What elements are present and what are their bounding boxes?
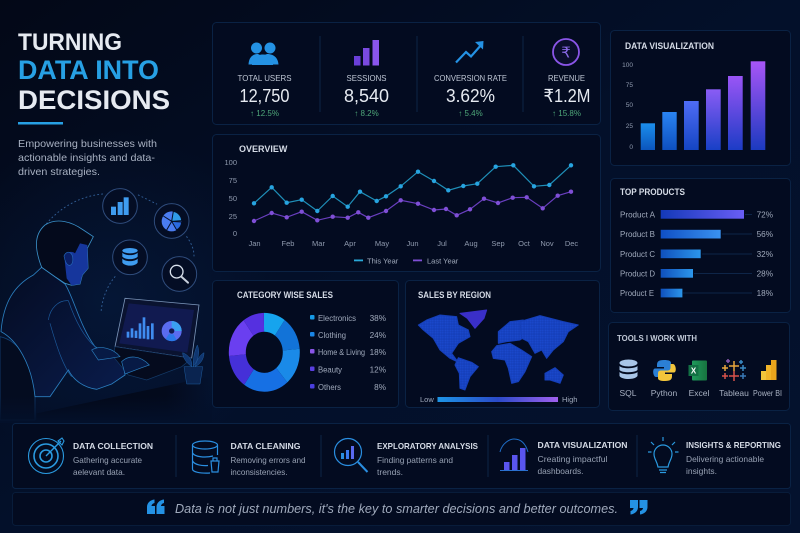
x axis: May — [375, 239, 389, 248]
legend: 38% — [370, 314, 386, 323]
quote mark close — [630, 500, 648, 514]
x axis: Apr — [344, 239, 356, 248]
panel: category wise sales — [212, 280, 398, 408]
KPI: revenue: ₹1.2M — [544, 86, 590, 106]
world map — [418, 310, 578, 390]
step: data visualization: DATA VISUALIZATION — [538, 440, 628, 450]
legend: This Year — [367, 256, 399, 266]
laptop — [113, 298, 199, 380]
KPI: revenue: ↑ 15.8% — [552, 109, 581, 118]
step: insights and reporting — [648, 437, 781, 476]
KPI: total users: 12,750 — [240, 86, 290, 106]
legend: 24% — [370, 331, 386, 340]
step: insights and reporting: Delivering actionable — [686, 455, 764, 464]
legend: Last Year — [427, 256, 459, 266]
step: data collection: Gathering accurate — [73, 456, 142, 465]
product rows — [620, 210, 773, 298]
y axis: 50 — [626, 102, 633, 109]
heading: CATEGORY WISE SALES — [237, 290, 333, 300]
step: data visualization — [500, 439, 628, 476]
step: exploratory analysis: EXPLORATORY ANALYSIS — [377, 441, 478, 451]
panel: top products — [610, 178, 790, 312]
step: insights and reporting: INSIGHTS & REPORTING — [686, 440, 781, 450]
tool label: Python: Python — [651, 388, 678, 398]
KPI: total users — [238, 42, 292, 118]
KPI: total users: ↑ 12.5% — [250, 109, 279, 118]
series: this year — [254, 165, 571, 211]
x axis: Nov — [540, 239, 554, 248]
KPI: conversion rate — [434, 41, 507, 118]
face — [65, 243, 88, 285]
x axis: Oct — [518, 239, 531, 248]
y axis: 75 — [626, 82, 633, 89]
y axis: 0 — [233, 229, 237, 238]
panel: quote — [12, 492, 790, 526]
step: data cleaning: Removing errors and — [230, 456, 306, 465]
map scale: High — [562, 395, 577, 404]
tool: SQL: SQL — [619, 388, 637, 398]
heading: TOP PRODUCTS — [620, 187, 685, 197]
product rows: Product B — [620, 230, 656, 239]
icon: bar chart bubble — [103, 189, 137, 223]
x axis: Mar — [312, 239, 325, 248]
panel: process steps — [12, 424, 790, 488]
step: data collection: DATA COLLECTION — [73, 441, 153, 451]
icon: database bubble — [113, 240, 147, 275]
tool: SQL — [619, 360, 638, 398]
KPI: sessions — [344, 40, 389, 118]
subtitle: driven strategies. — [18, 166, 100, 178]
x axis: Aug — [464, 239, 478, 248]
tool: Excel — [688, 360, 709, 398]
y axis: 25 — [229, 212, 237, 221]
quote text: Data is not just numbers, it's the key to smarter decisions and better outcomes. — [175, 502, 618, 516]
x axis: Dec — [565, 239, 578, 248]
product rows: Product D — [620, 270, 655, 278]
panel: overview line chart — [212, 134, 600, 272]
step: data visualization: Creating impactful — [538, 455, 608, 464]
x axis: Sep — [491, 239, 505, 248]
donut chart — [237, 322, 291, 382]
icon: pie bubble — [154, 204, 189, 238]
title: TURNING — [18, 29, 122, 56]
legend: 8% — [374, 383, 386, 392]
x axis: Jun — [406, 239, 419, 248]
KPI: conversion rate: ↑ 5.4% — [458, 109, 483, 118]
illustration: analyst at laptop — [0, 189, 210, 420]
desk — [37, 377, 210, 420]
KPI: sessions: 8,540 — [344, 86, 389, 106]
legend: 12% — [370, 366, 386, 374]
step: exploratory analysis: trends. — [377, 468, 403, 477]
y axis: 100 — [622, 62, 633, 69]
heading: OVERVIEW — [239, 144, 288, 154]
chair — [0, 337, 35, 420]
body — [1, 267, 125, 397]
heading: DATA VISUALIZATION — [625, 41, 714, 51]
legend: Home & Living — [318, 348, 365, 357]
legend — [354, 256, 459, 266]
subtitle: Empowering businesses with — [18, 138, 157, 150]
y axis: 0 — [629, 144, 633, 151]
y axis — [622, 62, 633, 151]
y axis — [224, 158, 237, 238]
title accent rule — [18, 122, 63, 124]
hands — [92, 348, 149, 374]
KPI: conversion rate: CONVERSION RATE — [434, 73, 507, 83]
step: exploratory analysis: Finding patterns and — [377, 456, 453, 465]
KPI: sessions: ↑ 8.2% — [354, 109, 379, 118]
plant — [183, 345, 204, 384]
tool: Python — [653, 360, 676, 381]
tool: Power BI — [753, 360, 782, 398]
KPI: revenue — [544, 39, 590, 118]
KPI: revenue: ₹ — [561, 44, 571, 62]
step: data cleaning: inconsistencies. — [230, 468, 288, 477]
step: data cleaning: DATA CLEANING — [230, 441, 301, 451]
KPI: sessions: SESSIONS — [346, 73, 387, 83]
panel: sales by region — [406, 280, 600, 408]
tool: Tableau — [719, 359, 749, 398]
step: data cleaning — [192, 441, 306, 477]
y axis: 50 — [229, 194, 237, 203]
y axis: 100 — [224, 158, 237, 167]
product rows: Product A — [620, 210, 656, 220]
panel: KPI summary — [212, 22, 600, 124]
title — [18, 29, 170, 115]
product rows: 56% — [757, 230, 773, 239]
head — [36, 221, 93, 285]
step: data collection — [28, 438, 153, 477]
icon: magnifier bubble — [162, 257, 197, 291]
map scale — [420, 395, 577, 404]
map scale: Low — [420, 395, 434, 404]
subtitle — [18, 138, 157, 178]
product rows: 28% — [757, 270, 773, 278]
product rows: Product E — [620, 289, 655, 298]
title: DECISIONS — [18, 85, 170, 115]
series: last year — [254, 192, 571, 221]
legend: 18% — [370, 348, 386, 357]
y axis: 25 — [626, 123, 633, 130]
legend: Beauty — [318, 366, 343, 374]
product rows: 18% — [757, 289, 773, 298]
legend — [310, 314, 386, 392]
tool: Power BI: Power BI — [753, 389, 782, 398]
x axis: Feb — [282, 239, 294, 248]
legend: Electronics — [318, 314, 356, 323]
tool: Excel: X — [691, 366, 697, 376]
KPI: total users: TOTAL USERS — [238, 73, 292, 83]
product rows: Product C — [620, 250, 655, 259]
legend: Others — [318, 383, 341, 392]
heading: SALES BY REGION — [418, 290, 491, 300]
step: insights and reporting: insights. — [686, 467, 717, 476]
bar chart — [641, 61, 765, 150]
product rows: 32% — [757, 250, 773, 259]
product rows: 72% — [757, 210, 773, 220]
title: DATA INTO — [18, 55, 159, 85]
tool: Excel: Excel — [689, 388, 709, 398]
x axis — [248, 239, 578, 248]
panel: data visualization bars — [610, 30, 790, 166]
subtitle: actionable insights and data- — [18, 152, 156, 164]
heading: TOOLS I WORK WITH — [617, 333, 697, 343]
KPI: revenue: REVENUE — [548, 73, 585, 83]
tool: Tableau: Tableau — [719, 388, 749, 398]
step: data collection: aelevant data. — [73, 468, 125, 477]
x axis: Jul — [437, 239, 447, 248]
quote mark open — [147, 500, 164, 514]
KPI: conversion rate: 3.62% — [446, 86, 495, 106]
step: exploratory analysis — [334, 438, 478, 477]
y axis: 75 — [229, 176, 237, 185]
step: data visualization: dashboards. — [538, 467, 584, 476]
x axis: Jan — [248, 239, 261, 248]
panel: tools — [608, 322, 790, 410]
legend: Clothing — [318, 331, 346, 340]
